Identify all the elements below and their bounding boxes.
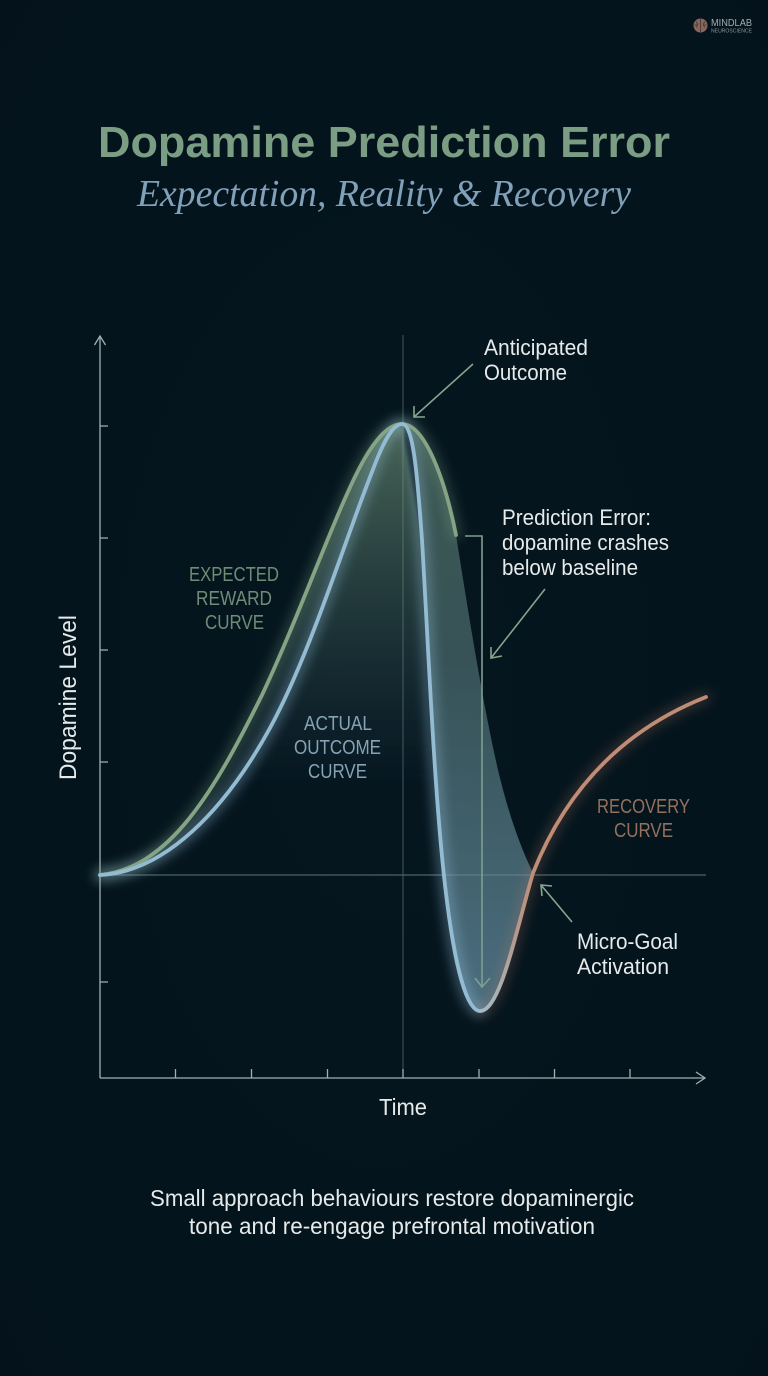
callout: prediction error: [502, 505, 669, 580]
baseline: [100, 874, 706, 876]
footer statement: tone and re-engage prefrontal motivation: [189, 1213, 595, 1239]
expected reward curve: [100, 424, 456, 875]
footer statement: Small approach behaviours restore dopaminergic: [150, 1185, 634, 1211]
y axis: [94, 336, 108, 1078]
label: expected reward curve: [189, 564, 279, 634]
callout: anticipated outcome: Anticipated: [484, 335, 588, 360]
x axis: [100, 1069, 705, 1084]
arrow: micro-goal: [541, 885, 572, 922]
footer statement: [150, 1185, 634, 1239]
callout: anticipated outcome: [484, 335, 588, 385]
chart: dopamine prediction error: [55, 335, 706, 1120]
label: expected reward curve: CURVE: [205, 612, 264, 634]
label: actual outcome curve: CURVE: [308, 761, 367, 783]
prediction error bracket arrow: [465, 536, 490, 987]
callout: prediction error: dopamine crashes: [502, 530, 669, 555]
label: recovery curve: CURVE: [614, 820, 673, 842]
arrow: anticipated outcome: [414, 364, 473, 417]
callout: anticipated outcome: Outcome: [484, 360, 567, 385]
arrow: prediction error: [491, 589, 545, 658]
actual outcome curve: [100, 424, 480, 1011]
icon: brain: [694, 18, 708, 32]
curve glow: [100, 424, 706, 1011]
subtitle: Expectation, Reality & Recovery: [136, 173, 631, 215]
shaded area under expected curve: [100, 424, 432, 875]
label: recovery curve: [597, 796, 690, 842]
y axis label: Dopamine Level: [55, 615, 82, 780]
logo subtitle: NEUROSCIENCE: [711, 28, 753, 34]
callout: micro-goal activation: Micro-Goal: [577, 929, 678, 954]
label: recovery curve: RECOVERY: [597, 796, 690, 818]
shaded prediction error gap: [402, 424, 533, 1011]
label: expected reward curve: REWARD: [196, 588, 272, 610]
callout: micro-goal activation: Activation: [577, 954, 669, 979]
logo wordmark: MINDLAB: [711, 17, 752, 29]
logo: MindLab Neuroscience: [694, 17, 753, 34]
title: Dopamine Prediction Error: [98, 118, 670, 167]
label: actual outcome curve: ACTUAL: [304, 713, 372, 735]
callout: micro-goal activation: [577, 929, 678, 979]
peak reference line: [402, 335, 404, 1078]
label: actual outcome curve: OUTCOME: [294, 737, 381, 759]
callout: prediction error: below baseline: [502, 555, 638, 580]
x axis label: Time: [379, 1094, 427, 1120]
label: actual outcome curve: [294, 713, 381, 783]
label: expected reward curve: EXPECTED: [189, 564, 279, 586]
callout: prediction error: Prediction Error:: [502, 505, 651, 530]
recovery curve: [480, 697, 706, 1011]
